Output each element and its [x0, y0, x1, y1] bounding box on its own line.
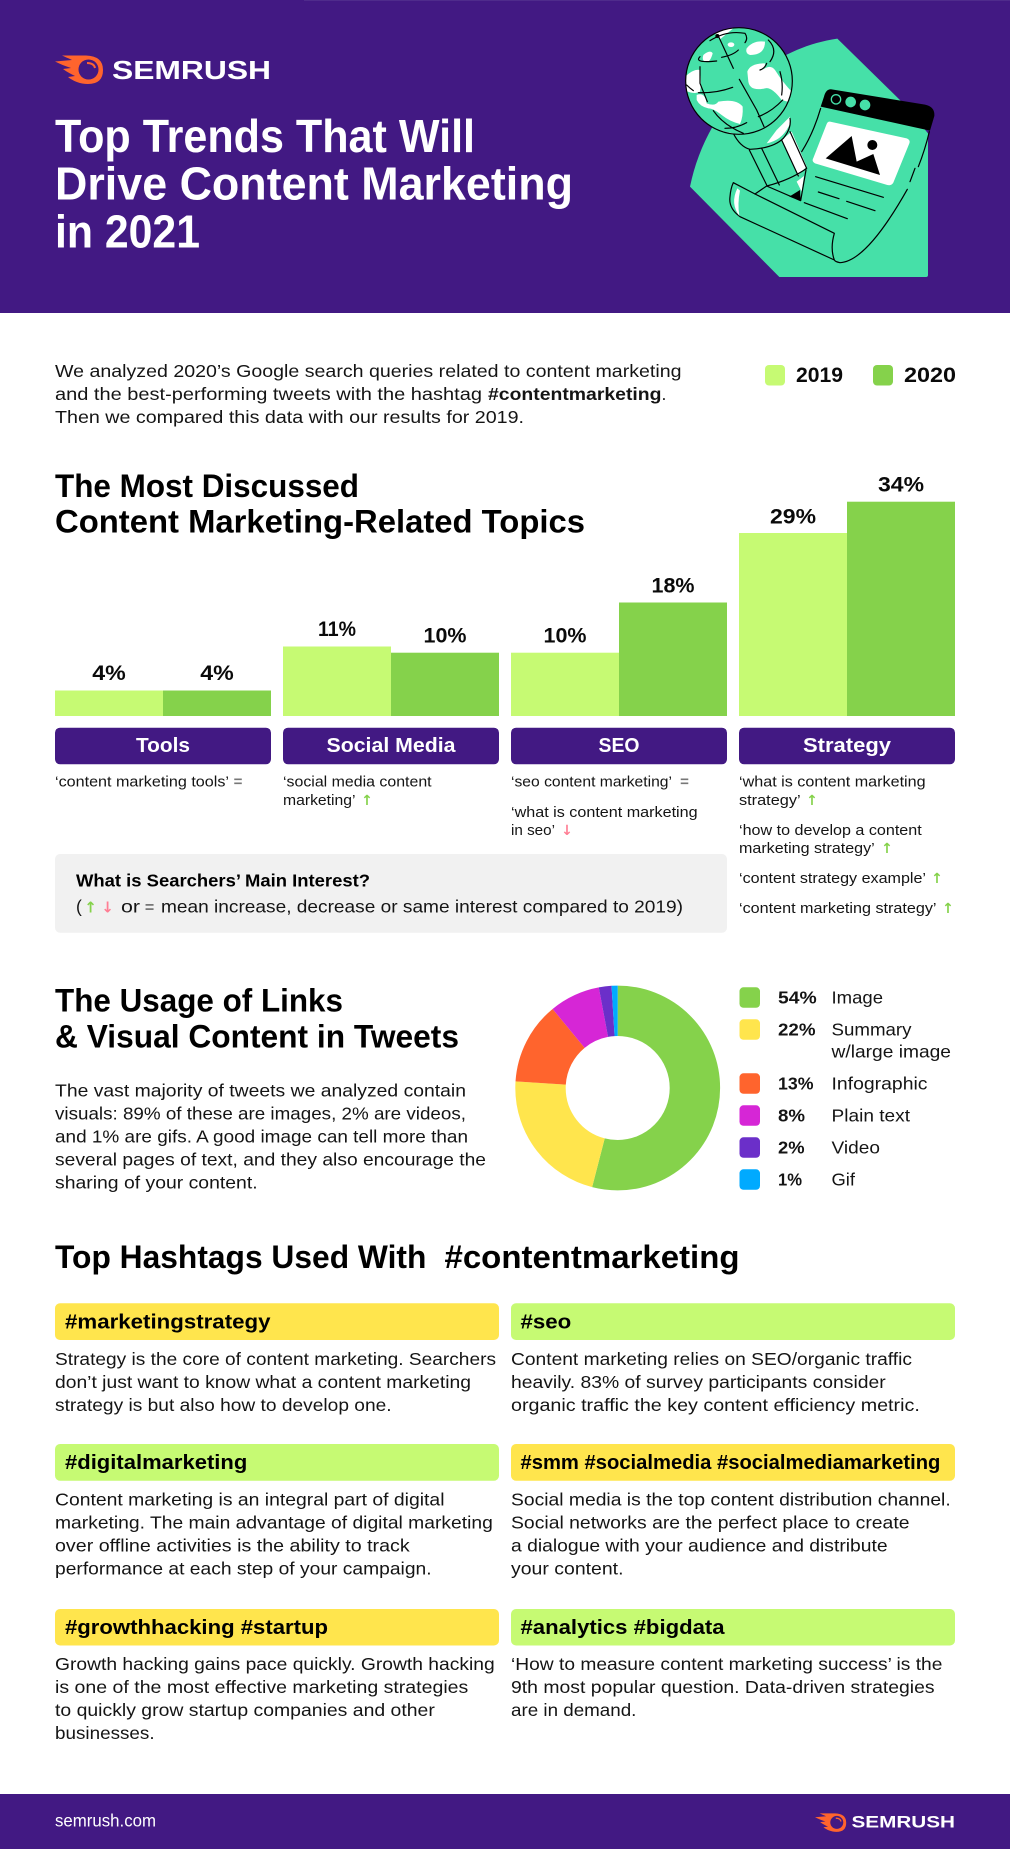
- legend: years: 2019: [796, 364, 843, 387]
- document outline: [730, 108, 929, 263]
- intro text: and the best-performing tweets with the hashtag: [55, 384, 482, 404]
- image placeholder: [813, 122, 910, 185]
- callout: searchers' main interest: (: [76, 897, 82, 917]
- callout: searchers' main interest: mean increase, decrease or same interest compared to 2019): [161, 897, 683, 917]
- text block: tweets visuals: [55, 1081, 486, 1193]
- panel: growthhacking startup: is one of the most effective marketing strategies: [55, 1677, 469, 1697]
- heading: usage of links: & Visual Content in Tweets: [55, 1018, 459, 1054]
- category label: social media: Social Media: [326, 734, 456, 757]
- donut legend: Image: [832, 987, 883, 1007]
- queries: strategy: ↑: [881, 841, 893, 857]
- panel: seo: [511, 1303, 955, 1415]
- category label: seo: [511, 728, 727, 764]
- panel: analytics bigdata: are in demand.: [511, 1700, 636, 1720]
- category label: tools: [55, 728, 271, 764]
- heading: usage of links: [55, 983, 459, 1054]
- donut legend: Plain text: [832, 1105, 910, 1125]
- queries: seo: ↓: [561, 823, 573, 839]
- queries: strategy: ‘what is content marketing: [739, 774, 926, 791]
- bars: seo: 10%: [544, 625, 587, 648]
- heading: usage of links: The Usage of Links: [55, 983, 343, 1019]
- panel: growthhacking startup: to quickly grow startup companies and other: [55, 1700, 435, 1720]
- queries: strategy: ↑: [806, 793, 818, 809]
- queries: strategy: ‘content strategy example’: [739, 870, 926, 887]
- panel: seo: #seo: [520, 1310, 571, 1333]
- callout: searchers' main interest: ↑: [84, 899, 97, 917]
- panel: growthhacking startup: [55, 1609, 499, 1743]
- donut chart: tweet content: [540, 1011, 695, 1165]
- panel: analytics bigdata: [511, 1609, 955, 1720]
- donut legend: Summary: [832, 1020, 912, 1040]
- donut legend: 22%: [778, 1020, 816, 1040]
- green background shape: [690, 39, 928, 277]
- icon: pencil: [748, 132, 807, 201]
- panel: smm socialmedia: #smm #socialmedia #socialmediamarketing: [520, 1451, 940, 1474]
- panel: digitalmarketing: performance at each step of your campaign.: [55, 1559, 432, 1579]
- text block: tweets visuals: and 1% are gifs. A good image can tell more than: [55, 1127, 468, 1147]
- heading: top hashtags: [55, 1239, 740, 1275]
- donut legend: 13%: [778, 1073, 814, 1093]
- document text lines: [804, 177, 883, 219]
- queries: strategy: ‘content marketing strategy’: [739, 900, 936, 917]
- footer: [0, 1794, 1010, 1849]
- queries: seo: ‘what is content marketing: [511, 804, 698, 821]
- legend: years: [765, 364, 956, 387]
- panel: analytics bigdata: #analytics #bigdata: [520, 1616, 725, 1639]
- panel: analytics bigdata: 9th most popular question. Data-driven strategies: [511, 1677, 935, 1697]
- panel: digitalmarketing: [55, 1444, 499, 1579]
- category label: seo: SEO: [598, 734, 640, 757]
- panel: marketingstrategy: Strategy is the core of content marketing. Searchers: [55, 1349, 496, 1369]
- donut legend: Video: [832, 1137, 880, 1157]
- callout: searchers' main interest: What is Searchers’ Main Interest?: [76, 871, 370, 891]
- text block: tweets visuals: sharing of your content.: [55, 1173, 258, 1193]
- donut legend: 8%: [778, 1105, 805, 1125]
- panel: digitalmarketing: #digitalmarketing: [65, 1451, 247, 1474]
- queries: tools: ‘content marketing tools’: [55, 774, 229, 791]
- intro text: .: [662, 384, 666, 404]
- queries: seo: [511, 774, 698, 839]
- panel: smm socialmedia: Social networks are the perfect place to create: [511, 1513, 910, 1533]
- category label: tools: Tools: [136, 734, 190, 757]
- queries: tools: =: [234, 774, 243, 791]
- panel: marketingstrategy: strategy is but also how to develop one.: [55, 1395, 392, 1415]
- queries: strategy: marketing strategy’: [739, 840, 875, 857]
- bars: tools: 4%: [200, 662, 234, 685]
- panel: growthhacking startup: #growthhacking #startup: [65, 1616, 328, 1639]
- text block: tweets visuals: The vast majority of tweets we analyzed contain: [55, 1081, 466, 1101]
- bars: social media: [283, 618, 499, 716]
- panel: seo: heavily. 83% of survey participants consider: [511, 1372, 886, 1392]
- panel: marketingstrategy: #marketingstrategy: [65, 1310, 271, 1333]
- donut legend: Infographic: [832, 1073, 928, 1093]
- panel: digitalmarketing: Content marketing is an integral part of digital: [55, 1490, 444, 1510]
- callout: searchers' main interest: [55, 854, 727, 933]
- queries: seo: in seo’: [511, 822, 555, 839]
- bars: seo: 18%: [652, 575, 695, 598]
- heading: top hashtags: #contentmarketing: [444, 1239, 740, 1275]
- panel: analytics bigdata: ‘How to measure content marketing success’ is the: [511, 1654, 942, 1674]
- icon: flame: [55, 56, 103, 84]
- callout: searchers' main interest: or: [121, 897, 140, 917]
- category label: social media: [283, 728, 499, 764]
- queries: social media: ↑: [361, 793, 373, 809]
- panel: marketingstrategy: [55, 1303, 499, 1415]
- category label: strategy: [739, 728, 955, 764]
- donut legend: 1%: [778, 1169, 802, 1189]
- heading: most discussed topics: The Most Discussed: [55, 468, 359, 504]
- bars: strategy: [739, 474, 955, 716]
- donut legend: [740, 987, 951, 1190]
- donut legend: w/large image: [830, 1041, 951, 1061]
- panel: digitalmarketing: over offline activities is the ability to track: [55, 1536, 410, 1556]
- panel: digitalmarketing: marketing. The main advantage of digital marketing: [55, 1513, 493, 1533]
- bars: tools: [55, 662, 271, 716]
- queries: seo: ‘seo content marketing’: [511, 774, 672, 791]
- text block: tweets visuals: visuals: 89% of these are images, 2% are videos,: [55, 1104, 466, 1124]
- queries: strategy: ‘how to develop a content: [739, 822, 923, 839]
- title: [55, 110, 573, 258]
- panel: seo: organic traffic the key content efficiency metric.: [511, 1395, 920, 1415]
- queries: strategy: ↑: [931, 871, 943, 887]
- bar chart: topics: [55, 474, 955, 716]
- bars: tools: 4%: [92, 662, 126, 685]
- icon: globe: [683, 28, 793, 149]
- bars: social media: 10%: [424, 625, 467, 648]
- donut legend: Gif: [832, 1169, 855, 1189]
- browser window bar: [821, 89, 934, 131]
- text block: tweets visuals: several pages of text, and they also encourage the: [55, 1150, 486, 1170]
- heading: top hashtags: Top Hashtags Used With: [55, 1239, 426, 1275]
- queries: strategy: [739, 774, 954, 917]
- illustration: globe pencil drawing on document: [683, 28, 934, 277]
- queries: strategy: strategy’: [739, 792, 801, 809]
- queries: seo: =: [680, 774, 689, 791]
- title: in 2021: [55, 206, 200, 258]
- panel: marketingstrategy: don’t just want to know what a content marketing: [55, 1372, 471, 1392]
- footer: semrush.com: [55, 1811, 156, 1831]
- intro text: Then we compared this data with our results for 2019.: [55, 407, 524, 427]
- logo: semrush: SEMRUSH: [112, 55, 271, 85]
- heading: most discussed topics: [55, 468, 585, 540]
- intro text: We analyzed 2020’s Google search queries related to content marketing: [55, 361, 682, 381]
- panel: seo: Content marketing relies on SEO/organic traffic: [511, 1349, 912, 1369]
- bars: strategy: 34%: [878, 474, 924, 497]
- title: Drive Content Marketing: [55, 158, 573, 210]
- callout: searchers' main interest: ↓: [101, 899, 114, 917]
- category label: strategy: Strategy: [803, 734, 892, 757]
- panel: smm socialmedia: [511, 1444, 955, 1579]
- legend: years: 2020: [904, 364, 956, 387]
- panel: smm socialmedia: Social media is the top content distribution channel.: [511, 1490, 951, 1510]
- panel: smm socialmedia: a dialogue with your audience and distribute: [511, 1536, 888, 1556]
- bars: seo: [511, 575, 727, 716]
- bars: strategy: 29%: [770, 505, 816, 528]
- callout: searchers' main interest: =: [145, 900, 154, 917]
- panel: growthhacking startup: businesses.: [55, 1723, 155, 1743]
- bars: social media: 11%: [318, 618, 356, 641]
- donut legend: 2%: [778, 1137, 805, 1157]
- queries: strategy: ↑: [942, 901, 954, 917]
- intro text: [55, 361, 682, 427]
- title: Top Trends That Will: [55, 110, 475, 162]
- panel: smm socialmedia: your content.: [511, 1559, 624, 1579]
- heading: most discussed topics: Content Marketing-Related Topics: [55, 504, 585, 540]
- logo: semrush: [55, 55, 271, 85]
- panel: growthhacking startup: Growth hacking gains pace quickly. Growth hacking: [55, 1654, 495, 1674]
- queries: social media: ‘social media content: [283, 774, 432, 791]
- queries: social media: [283, 774, 432, 809]
- footer logo: [815, 1812, 955, 1832]
- donut legend: 54%: [778, 987, 817, 1007]
- header band: [0, 0, 1010, 313]
- intro text: #contentmarketing: [488, 384, 662, 404]
- queries: social media: marketing’: [283, 792, 356, 809]
- footer logo: SEMRUSH: [852, 1812, 955, 1832]
